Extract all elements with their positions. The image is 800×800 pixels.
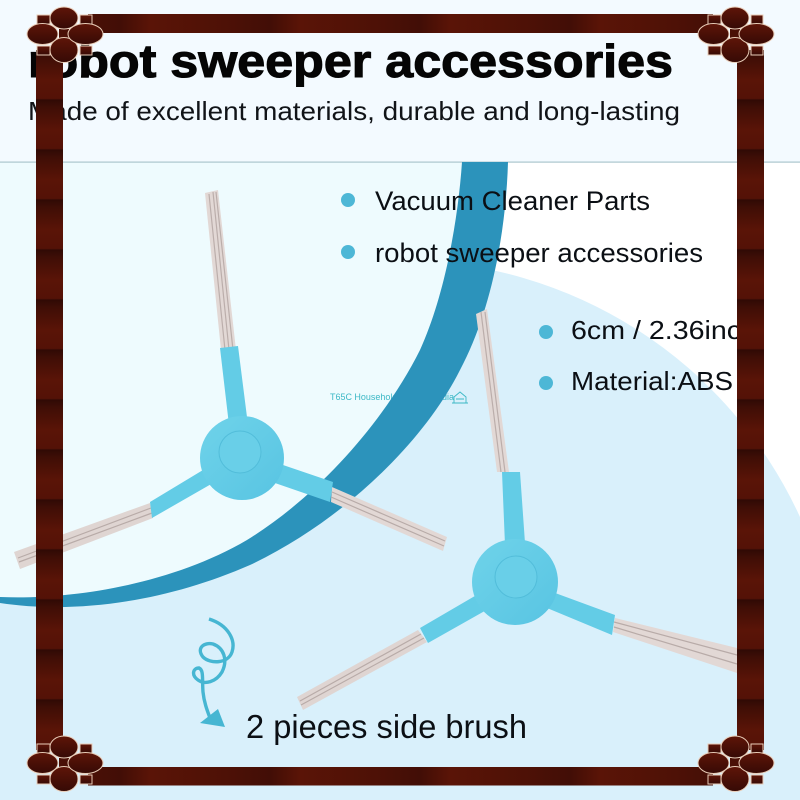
hub: [472, 539, 558, 625]
bullet list: specs: 6cm / 2.36inch: [571, 315, 757, 345]
small watermark label: T65C Household Vacuum India: [330, 392, 454, 402]
frame: bottom bar: [88, 767, 713, 786]
corner ornament: top right: [698, 7, 774, 62]
frame: left bar: [36, 50, 63, 750]
bullet list: top: [341, 186, 703, 268]
background: lower page: [0, 162, 800, 800]
icon: spiral arrow: [194, 619, 233, 727]
corner ornament: top left: [27, 7, 103, 62]
bristles: [297, 309, 737, 710]
caption text: 2 pieces side brush: [246, 708, 527, 745]
bullet list: specs: [539, 315, 757, 396]
arms: [150, 346, 333, 518]
bullet list: top: robot sweeper accessories: [375, 238, 703, 268]
bullet list: top: Vacuum Cleaner Parts: [375, 186, 650, 216]
side brush: right: [297, 309, 737, 710]
frame: right bar: [737, 50, 764, 750]
frame: top bar: [88, 14, 713, 33]
title: robot sweeper accessories: [28, 35, 673, 87]
corner ornament: bottom left: [27, 736, 103, 792]
subtitle: Made of excellent materials, durable and long-lasting: [28, 96, 680, 126]
side brush: left: [14, 190, 447, 569]
bullet list: specs: Material:ABS: [571, 366, 733, 396]
header band: [0, 0, 800, 163]
hub: [200, 416, 284, 500]
corner ornament: bottom right: [698, 736, 774, 792]
bristles: [14, 190, 447, 569]
arms: [420, 472, 615, 643]
curved blue band: [0, 162, 508, 607]
